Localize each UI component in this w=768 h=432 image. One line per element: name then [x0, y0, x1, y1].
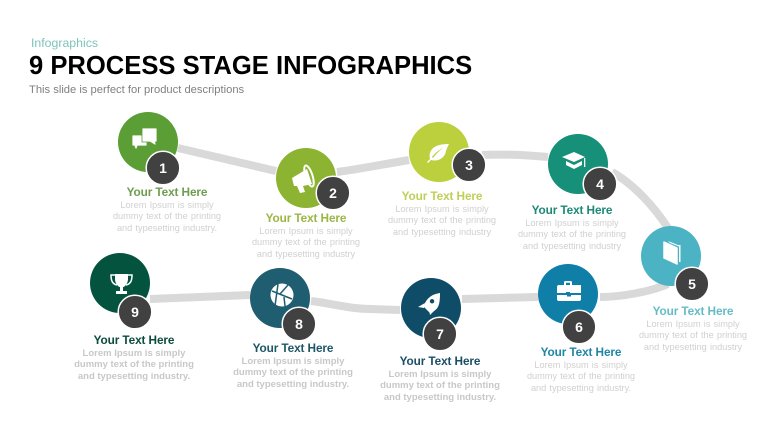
- text block 2: [252, 211, 360, 259]
- icon: book: [664, 241, 680, 264]
- text block 6: Lorem Ipsum is simply: [534, 360, 628, 370]
- text block 2: dummy text of the printing: [252, 237, 360, 247]
- text block 5: and typesetting industry: [644, 342, 742, 352]
- text block 5: Lorem Ipsum is simply: [646, 319, 740, 329]
- icon: rocket: [418, 293, 440, 315]
- text block 1: Your Text Here: [127, 185, 207, 199]
- text block 2: Lorem Ipsum is simply: [259, 226, 353, 236]
- stage 2 node: [276, 148, 350, 210]
- text block 9: and typesetting industry.: [78, 371, 190, 382]
- text block 6: dummy text of the printing: [527, 371, 635, 381]
- stage 1 node: [118, 112, 180, 185]
- stage 1 node: 1: [159, 160, 167, 176]
- text block 4: Lorem Ipsum is simply: [525, 218, 619, 228]
- text block 3: Your Text Here: [402, 189, 482, 203]
- text block 6: and typesetting industry.: [531, 383, 631, 393]
- text block 3: and typesetting industry: [393, 227, 491, 237]
- text block 8: and typesetting industry.: [237, 379, 349, 390]
- stage 9 node: [90, 253, 152, 329]
- stage 7 node: 7: [436, 326, 444, 342]
- stage 6 node: 6: [575, 319, 583, 335]
- text block 9: Lorem Ipsum is simply: [83, 348, 185, 359]
- text block 4: [518, 203, 626, 251]
- icon: graduation cap: [562, 152, 585, 169]
- stage 8 node: [250, 268, 316, 341]
- text block 4: dummy text of the printing: [518, 229, 626, 239]
- stage 5 node: [641, 226, 709, 301]
- text block 8: dummy text of the printing: [233, 367, 353, 378]
- icon: globe: [270, 284, 294, 306]
- text block 7: and typesetting industry.: [384, 392, 496, 403]
- text block 9: dummy text of the printing: [74, 359, 194, 370]
- icon: briefcase: [557, 281, 581, 301]
- text block 1: and typesetting industry.: [117, 223, 217, 233]
- stage 5 node: 5: [688, 276, 696, 292]
- text block 2: and typesetting industry: [257, 249, 355, 259]
- text block 7: dummy text of the printing: [380, 380, 500, 391]
- text block 5: [639, 304, 747, 352]
- text block 1: [113, 185, 221, 233]
- stage 7 node: [401, 278, 461, 351]
- text block 1: Lorem Ipsum is simply: [120, 200, 214, 210]
- text block 7: Lorem Ipsum is simply: [389, 369, 491, 380]
- stage 8 node: 8: [295, 316, 303, 332]
- text block 9: Your Text Here: [94, 333, 174, 347]
- text block 3: [388, 189, 496, 237]
- eyebrow label: Infographics: [31, 36, 98, 50]
- text block 9: [74, 333, 194, 382]
- icon: leaf: [427, 144, 449, 163]
- text block 3: dummy text of the printing: [388, 215, 496, 225]
- icon: trophy: [111, 274, 132, 294]
- text block 5: Your Text Here: [653, 304, 733, 318]
- text block 8: Your Text Here: [253, 341, 333, 355]
- text block 4: and typesetting industry: [523, 241, 621, 251]
- title: 9 PROCESS STAGE INFOGRAPHICS: [29, 52, 472, 80]
- text block 3: Lorem Ipsum is simply: [395, 204, 489, 214]
- text block 4: Your Text Here: [532, 203, 612, 217]
- text block 5: dummy text of the printing: [639, 330, 747, 340]
- text block 8: [233, 341, 353, 390]
- stage 2 node: 2: [329, 185, 337, 201]
- text block 7: Your Text Here: [400, 354, 480, 368]
- stage 4 node: [548, 134, 617, 201]
- text block 6: [527, 345, 635, 393]
- stage 6 node: [538, 264, 598, 344]
- icon: megaphone: [292, 164, 316, 193]
- text block 6: Your Text Here: [541, 345, 621, 359]
- text block 8: Lorem Ipsum is simply: [242, 356, 344, 367]
- subtitle: This slide is perfect for product descriptions: [29, 84, 244, 96]
- text block 1: dummy text of the printing: [113, 211, 221, 221]
- text block 2: Your Text Here: [266, 211, 346, 225]
- stage 4 node: 4: [596, 176, 604, 192]
- stage 3 node: [409, 122, 486, 182]
- stage 9 node: 9: [131, 304, 139, 320]
- stage 3 node: 3: [465, 157, 473, 173]
- text block 7: [380, 354, 500, 403]
- connector path: [150, 148, 668, 310]
- icon: chat bubbles: [133, 129, 156, 148]
